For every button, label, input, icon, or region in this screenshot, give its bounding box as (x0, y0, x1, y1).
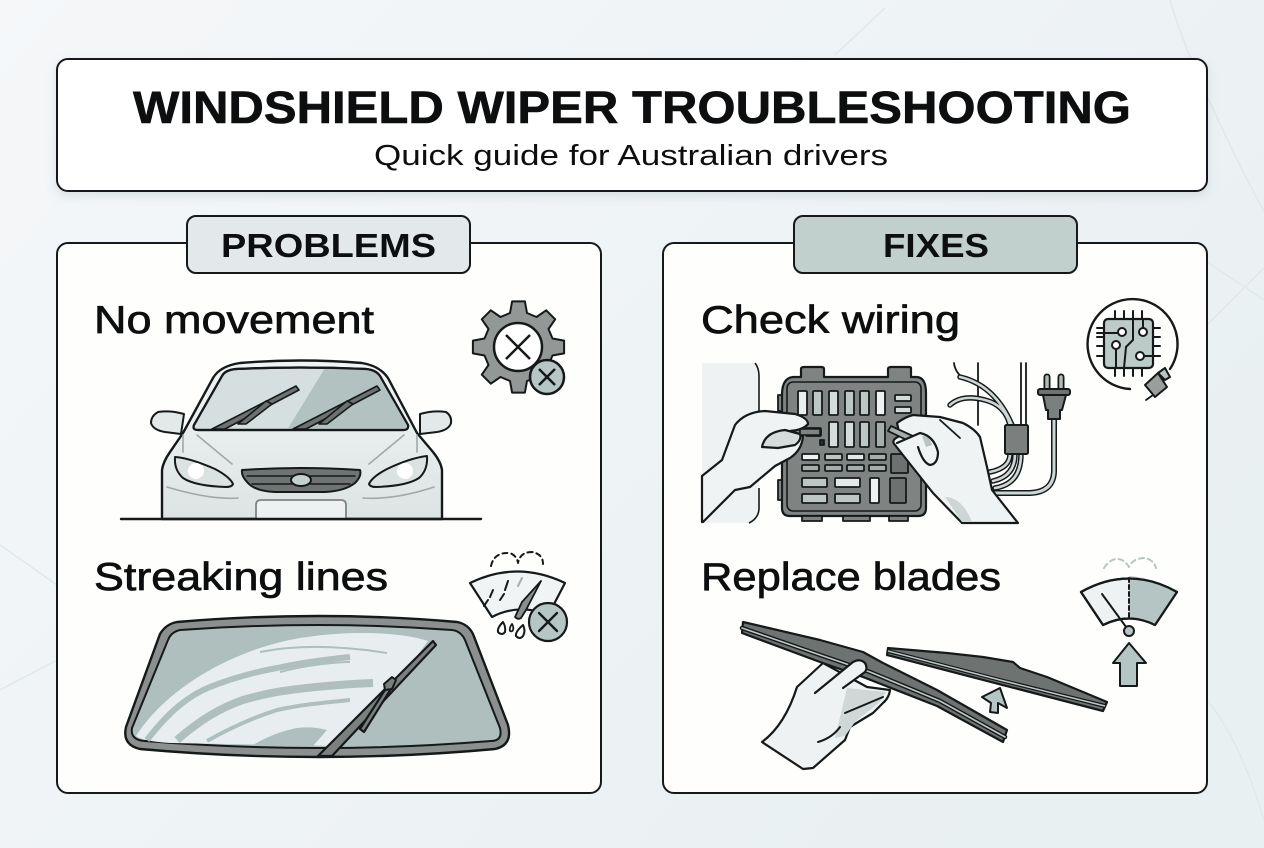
subtitle: Quick guide for Australian drivers (374, 140, 888, 172)
illustration: left hand (702, 411, 820, 522)
problems tab (187, 216, 470, 273)
old blade (742, 622, 1007, 742)
fixes tab: FIXES (883, 227, 989, 264)
plate (256, 500, 346, 519)
plug (1047, 377, 1061, 390)
trim edge (749, 363, 759, 523)
illustration: cables and plug (950, 363, 1070, 493)
icon: streaking wiper (470, 552, 567, 641)
illustration: streaked windshield (125, 616, 509, 757)
illustration: fuse box (778, 367, 926, 521)
panel: problems (57, 216, 601, 793)
grille (242, 468, 360, 492)
headlights (175, 457, 233, 487)
heading: replace blades: Replace blades (701, 556, 1001, 599)
car body (162, 360, 442, 519)
wiper (318, 641, 436, 756)
icon: circuit chip and plug (1088, 299, 1178, 400)
ground line (121, 518, 481, 520)
illustration: car front (121, 360, 481, 519)
wipers (212, 386, 299, 429)
heading: check wiring: Check wiring (701, 299, 960, 342)
illustration: hand holding blade (742, 622, 1007, 769)
title: WINDSHIELD WIPER TROUBLESHOOTING (133, 82, 1131, 133)
icon: failed gear (473, 301, 564, 394)
mirrors (151, 411, 184, 434)
arrow: up to blade (982, 688, 1007, 713)
hood lines (167, 435, 434, 498)
illustration: right hand (888, 415, 1018, 523)
panel: fixes (663, 216, 1207, 793)
illustration: left side trim (702, 363, 759, 523)
heading: no movement: No movement (94, 299, 374, 342)
illustration: new blade (887, 648, 1107, 711)
problems tab: PROBLEMS (221, 227, 436, 264)
windshield (194, 368, 408, 430)
palm and fingers (762, 663, 890, 769)
fuses (798, 391, 911, 503)
thumb (815, 660, 866, 700)
heading: streaking lines: Streaking lines (94, 556, 388, 599)
icon: replace blade gauge (1081, 558, 1177, 686)
header panel (57, 59, 1207, 191)
fixes tab (794, 216, 1077, 273)
tyres (178, 508, 424, 519)
streaks (136, 633, 428, 746)
